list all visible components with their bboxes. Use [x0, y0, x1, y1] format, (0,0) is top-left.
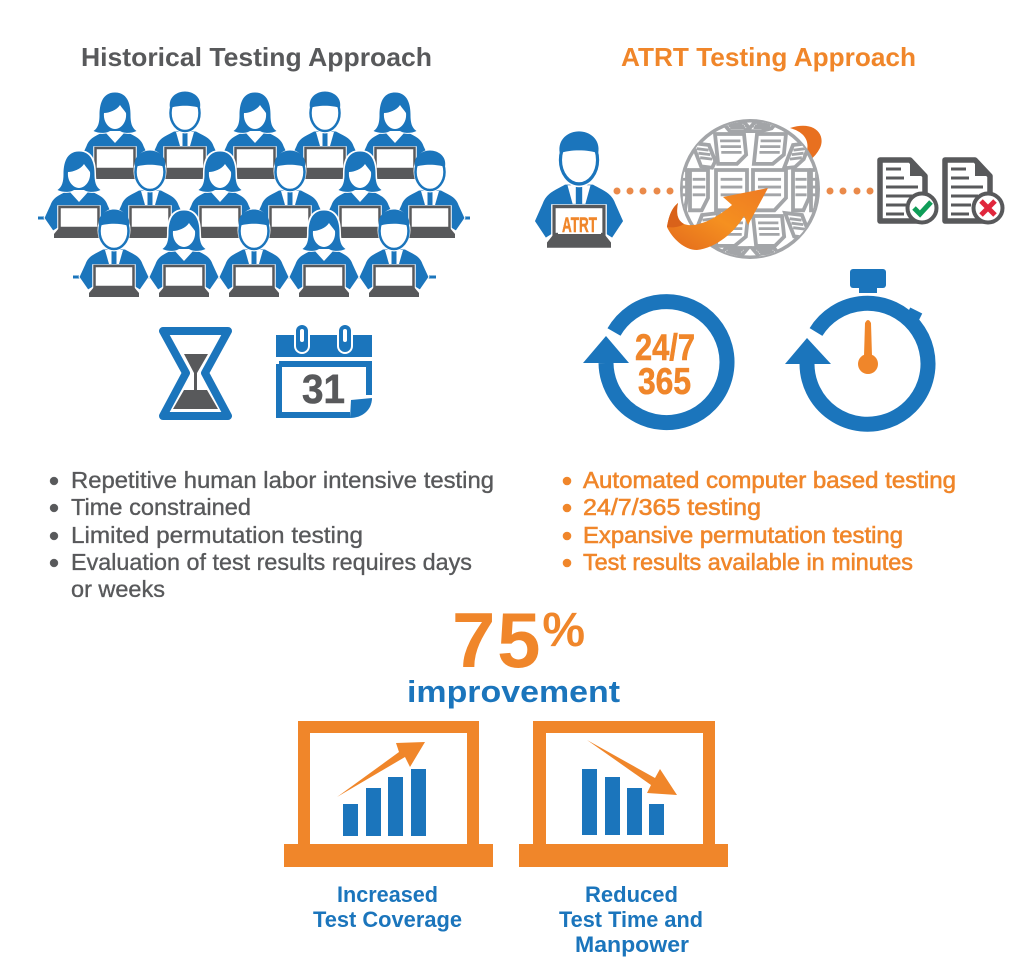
illustration: globe of documents with orange arrow: [667, 119, 822, 259]
icon: failed test report with red cross: [945, 158, 1002, 222]
list: ATRT approach bullets: Test results available in minutes: [583, 549, 913, 575]
illustration: ATRT operator at laptop: [534, 130, 624, 248]
list: historical approach bullets: Evaluation of test results requires days: [71, 549, 472, 575]
big stat: 75%: %: [542, 604, 585, 657]
icon: circular arrow with 24/7 365: [583, 302, 727, 423]
caption: increased test coverage: [313, 882, 462, 932]
icon: hourglass: [163, 331, 228, 416]
list: ATRT approach bullets: Expansive permutation testing: [583, 522, 903, 548]
list: historical approach bullets: Limited permutation testing: [71, 522, 363, 548]
list: ATRT approach bullets: [563, 467, 956, 575]
list: historical approach bullets: Repetitive human labor intensive testing: [71, 467, 494, 493]
caption: reduced test time and manpower: Manpower: [575, 932, 689, 957]
dotted connector: globe to test results: [826, 188, 874, 194]
icon: laptop with falling bar chart: [519, 721, 728, 867]
icon: passed test report with green check: [880, 158, 936, 222]
icon: laptop with rising bar chart: [284, 721, 493, 867]
heading: historical testing approach: Historical Testing Approach: [81, 42, 432, 72]
caption: reduced test time and manpower: [559, 882, 703, 957]
list: historical approach bullets: Time constrained: [71, 494, 251, 520]
icon: circular arrow with 24/7 365: 365: [638, 361, 691, 402]
caption: reduced test time and manpower: Test Time and: [559, 907, 703, 932]
icon: circular arrow with 24/7 365: 24/7: [635, 327, 695, 368]
list: historical approach bullets: [50, 467, 494, 602]
list: ATRT approach bullets: 24/7/365 testing: [583, 494, 761, 520]
caption: increased test coverage: Test Coverage: [313, 907, 462, 932]
icon: stopwatch with circular arrow: [785, 269, 928, 424]
illustration: ATRT operator at laptop: ATRT: [562, 214, 597, 237]
list: historical approach bullets: or weeks: [71, 576, 165, 602]
icon: calendar showing 31: [276, 323, 372, 418]
caption: reduced test time and manpower: Reduced: [585, 882, 678, 907]
icon: calendar showing 31: 31: [302, 366, 345, 412]
caption: increased test coverage: Increased: [337, 882, 438, 907]
big stat: 75%: 75: [452, 596, 541, 684]
illustration: group of human testers at laptops: [38, 90, 470, 297]
heading: ATRT testing approach: ATRT Testing Approach: [621, 42, 916, 72]
list: ATRT approach bullets: Automated computer based testing: [583, 467, 956, 493]
dotted connector: operator to globe: [614, 188, 674, 194]
subheading: improvement: improvement: [407, 674, 620, 709]
